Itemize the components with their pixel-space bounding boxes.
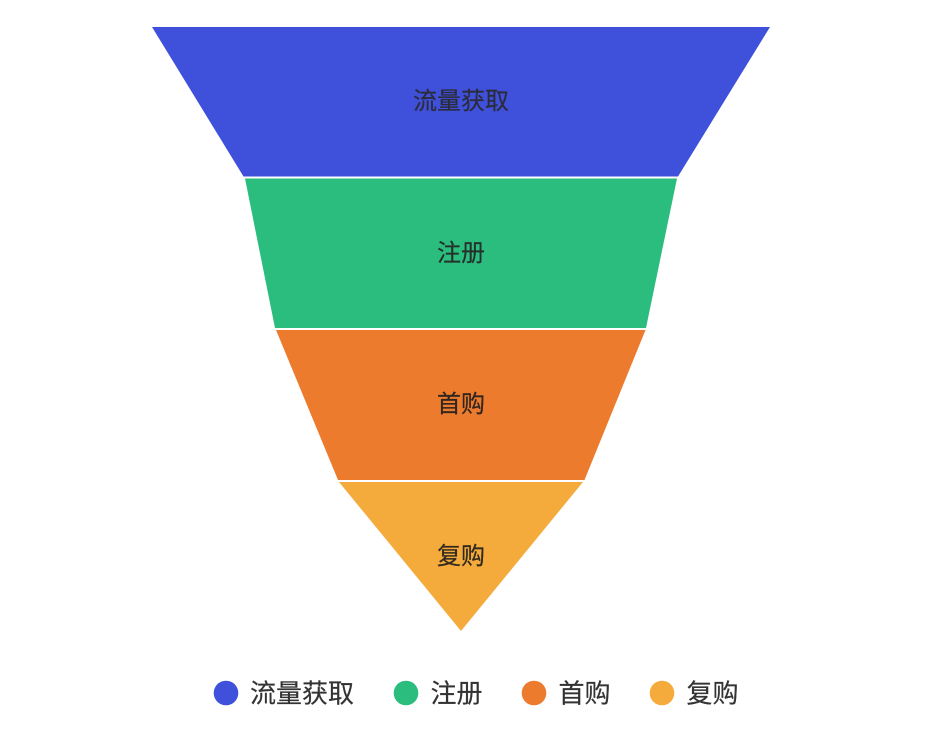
legend item: 复购 (650, 678, 739, 708)
legend item: 注册: 注册 (430, 678, 483, 708)
funnel stage: 注册 (245, 178, 677, 328)
funnel stage: 注册: 注册 (437, 240, 485, 267)
funnel stage: 复购 (339, 482, 583, 631)
funnel stage: 首购 (276, 330, 646, 480)
legend item: 首购 (522, 678, 611, 708)
funnel stage: 复购: 复购 (437, 543, 485, 570)
legend item: 首购: 首购 (558, 678, 611, 708)
legend item: 注册 (394, 678, 483, 708)
funnel stage: 流量获取 (152, 27, 770, 176)
funnel chart (152, 27, 770, 631)
legend item: 复购: 复购 (686, 678, 739, 708)
funnel stage: 流量获取: 流量获取 (413, 88, 509, 115)
legend item: 流量获取: 流量获取 (250, 678, 354, 708)
funnel stage: 首购: 首购 (437, 391, 485, 418)
legend (214, 678, 739, 708)
